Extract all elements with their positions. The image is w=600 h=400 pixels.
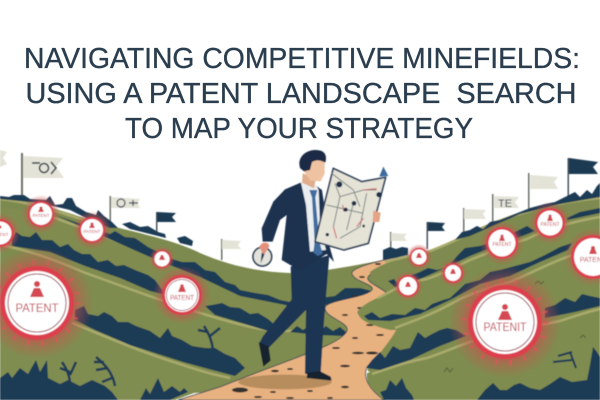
hill: back right [370,197,600,290]
dark brush right 2 [364,243,572,321]
patent badge: mid left [153,266,211,324]
edge highlights [0,199,310,378]
title: NAVIGATING COMPETITIVE MINEFIELDS: [24,43,580,75]
hill: back left [0,197,400,320]
flags on left hills [0,150,241,260]
foreground brush right [380,378,414,400]
map [315,168,386,250]
jacket [262,183,334,271]
winding path [178,257,398,400]
hill: second left [0,208,380,340]
dark brush right 3 [366,328,466,370]
dark brush band 3 [75,306,245,376]
right hand [373,211,381,222]
patent badge: top right: PATENT [541,222,559,228]
patent badge: large right [449,266,561,378]
patent badge: left edge [0,213,20,253]
plants left [60,326,220,386]
hill: third right [367,248,600,376]
left hills [0,195,400,400]
hill: third left [0,243,347,400]
hill: second right [358,215,600,330]
hill: front left [0,318,235,400]
foreground brush left [0,360,118,400]
patent badge: right edge [564,228,600,286]
patent badge: small right one [439,259,467,287]
left hand [259,243,269,255]
patent badge: large left: PATENT [16,301,59,315]
edge highlights [372,198,600,374]
right hills [358,183,600,400]
path stones [232,263,388,399]
patent badge: small right three [393,271,423,301]
shirt [301,181,326,252]
compass [253,247,272,266]
neck and face [302,173,316,188]
patent badge: top left [22,195,60,233]
patent badge: upper left: PATENT [83,229,101,234]
tie [309,190,323,256]
patent badge: mid left: PATENT [170,295,195,302]
title: TO MAP YOUR STRATEGY [125,113,473,145]
patent badge: upper left [73,211,111,249]
patent badge: top left: PATENT [32,213,50,218]
patent badge: small right two [406,244,432,270]
title [24,43,580,145]
patent badge: top right [529,202,571,244]
shadow [238,375,332,389]
landscape artwork [0,150,600,400]
dark brush band 2 [12,232,170,296]
patent badge: small left [149,246,175,272]
shoes [259,342,332,381]
patent badge: large left [0,247,93,359]
patent badge: upper right [480,221,524,265]
title: USING A PATENT LANDSCAPE SEARCH [26,78,576,110]
flags on right hills [390,158,598,249]
grass marks [444,281,586,372]
hill: front right [367,308,600,400]
dark brush right 1 [383,247,408,260]
trousers [259,255,329,374]
businessman with map [238,150,388,389]
flags on right hills: TE [498,198,512,210]
dark brush band 1 [0,195,118,228]
patent badge: upper right: PATENT [493,242,511,248]
hair [299,150,326,171]
patent badge: large right: PATENIT [484,320,527,334]
